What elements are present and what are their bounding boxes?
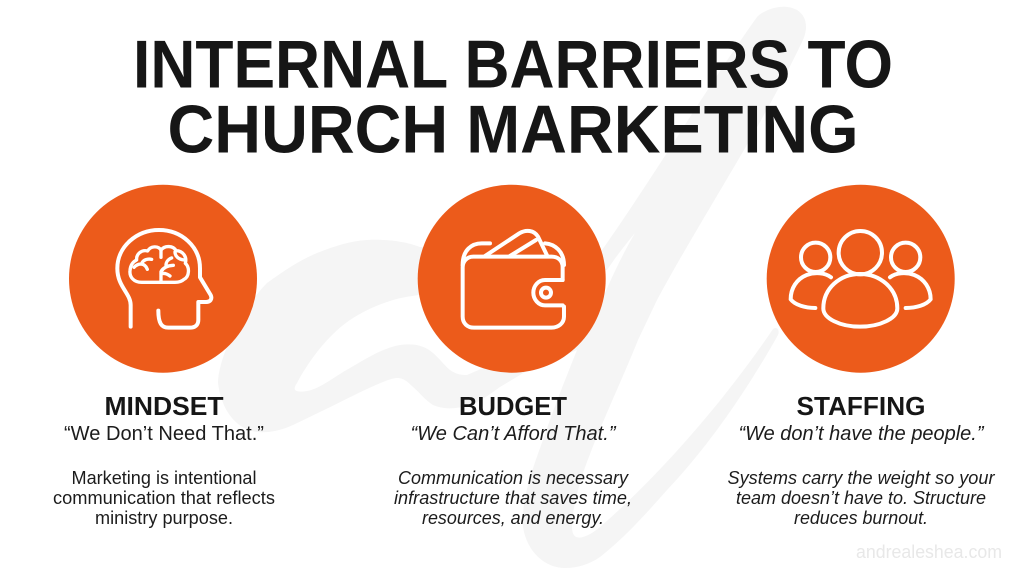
text: budget description: infrastructure that saves time, xyxy=(394,487,632,508)
text: budget description xyxy=(394,467,632,528)
panel: budget xyxy=(394,185,632,528)
text: budget description: Communication is necessary xyxy=(398,467,630,488)
title: INTERNAL BARRIERS TO xyxy=(133,26,893,102)
text: mindset description: ministry purpose. xyxy=(95,507,233,528)
heading: budget: BUDGET xyxy=(459,393,567,421)
quote: staffing: “We don’t have the people.” xyxy=(738,422,985,445)
text: staffing description: reduces burnout. xyxy=(794,507,928,528)
quote: mindset: “We Don’t Need That.” xyxy=(64,422,264,445)
text: staffing description: Systems carry the weight so your xyxy=(728,467,995,488)
background watermark xyxy=(218,7,806,568)
website credit: andrealeshea.com xyxy=(856,541,1002,562)
icon: wallet xyxy=(418,185,606,373)
text: staffing description: team doesn’t have to. Structure xyxy=(736,487,986,508)
title xyxy=(133,26,893,168)
panel: staffing xyxy=(728,185,995,528)
panel: mindset xyxy=(53,185,275,528)
icon: head with brain xyxy=(69,185,257,373)
text: mindset description xyxy=(53,467,275,528)
heading: staffing: STAFFING xyxy=(796,393,926,421)
icon: three people xyxy=(767,185,955,373)
title: CHURCH MARKETING xyxy=(168,92,858,168)
quote: budget: “We Can’t Afford That.” xyxy=(410,422,617,445)
text: mindset description: communication that reflects xyxy=(53,487,275,508)
text: budget description: resources, and energy. xyxy=(422,507,604,528)
heading: mindset: MINDSET xyxy=(104,393,224,421)
text: mindset description: Marketing is intentional xyxy=(72,467,256,488)
text: staffing description xyxy=(728,467,995,528)
